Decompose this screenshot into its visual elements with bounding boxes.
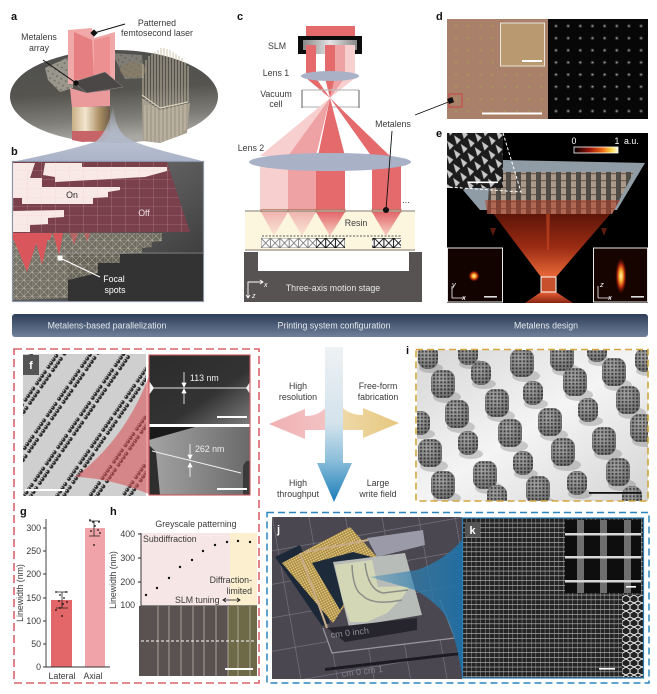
metalens chip <box>73 72 123 93</box>
panel g: bar chart <box>15 506 110 681</box>
bright field image <box>447 19 548 119</box>
panel i: lattices <box>406 346 649 502</box>
brown blur <box>120 62 146 78</box>
gold dashed frame <box>416 350 648 501</box>
diffraction-limited zone <box>230 533 257 606</box>
label g: g <box>20 506 27 518</box>
y ticks <box>120 529 135 610</box>
text: subdiffraction: Subdiffraction <box>143 534 197 544</box>
text: high resolution: High <box>289 381 307 391</box>
lens 1 <box>301 71 359 81</box>
data dots <box>55 519 101 617</box>
tick labels: 150 <box>26 593 41 603</box>
lattice blobs <box>417 350 648 501</box>
xz focal spot inset: z <box>599 280 604 289</box>
error bars <box>56 521 100 608</box>
label f: f <box>29 360 33 372</box>
text: focal spots: Focal <box>103 274 125 284</box>
xz focal spot inset: x <box>607 293 612 302</box>
text: diffraction limited: Diffraction- <box>210 575 252 585</box>
tick labels: 250 <box>26 546 41 556</box>
metalens slab <box>463 160 645 210</box>
main scale bar <box>482 112 542 114</box>
input beam <box>306 26 355 38</box>
tuning arrow <box>223 598 240 602</box>
tick labels: 300 <box>26 523 41 533</box>
banner text 1: Metalens-based parallelization <box>48 320 167 330</box>
tick labels: 200 <box>26 569 41 579</box>
lower red beam <box>72 131 110 142</box>
xz focal spot inset <box>594 248 648 302</box>
text: high resolution <box>279 381 317 402</box>
label i: i <box>406 345 409 357</box>
red zoom fan <box>75 376 149 494</box>
focus box <box>541 277 556 292</box>
pillar array lower mass <box>142 98 190 143</box>
photo: chevron lines <box>352 563 408 602</box>
subdiffraction zone <box>141 533 230 606</box>
beamlets from SLM <box>298 45 362 73</box>
text: high throughput: High <box>289 478 307 488</box>
text: high throughput <box>277 478 320 499</box>
axes labels <box>251 282 268 300</box>
text: focal spots: spots <box>104 285 126 295</box>
printed lattice <box>261 238 401 248</box>
text: metalens array: Metalens <box>21 32 57 42</box>
text labels c: Lens 2 <box>238 143 264 153</box>
funnel to b <box>12 106 205 162</box>
bottom right lattice <box>622 595 643 677</box>
panel j-k: blue dashed frame <box>267 512 649 683</box>
xy focal spot inset: y <box>451 280 457 289</box>
pillar array lower lines <box>145 104 185 142</box>
text: patterned laser: Patterned <box>138 18 176 28</box>
blue projection cone <box>370 540 462 675</box>
banner <box>12 314 648 337</box>
xy focal spot inset: x <box>461 293 466 302</box>
text: focal spots <box>103 274 126 295</box>
data points <box>145 540 251 596</box>
axes labels: z <box>251 293 256 300</box>
label e: e <box>436 128 442 140</box>
photo: tan strips <box>300 540 368 628</box>
SEM inset <box>447 133 503 188</box>
metalens leader <box>383 131 392 213</box>
banner text 2: Printing system configuration <box>278 320 391 330</box>
lens 2 <box>249 153 411 171</box>
substrate line <box>245 249 415 251</box>
SLM <box>298 36 362 54</box>
text: free-form: fabrication <box>358 392 398 402</box>
text labels c: Vacuum <box>260 89 292 99</box>
leader to red box <box>415 98 454 115</box>
text: diffraction limited: limited <box>227 586 252 596</box>
laser beam upper <box>68 28 115 84</box>
tick labels: 50 <box>31 639 41 649</box>
text: large write field: Large <box>367 478 389 488</box>
lower right shade <box>68 254 203 301</box>
pillar array <box>143 48 188 108</box>
x labels: Lateral <box>49 671 75 681</box>
dark background <box>12 162 204 302</box>
text labels c <box>238 41 411 228</box>
y title: Linewidth (nm) <box>15 564 25 622</box>
label b: b <box>11 146 18 158</box>
text: diffraction limited <box>210 575 252 596</box>
focus cylinder <box>72 107 110 132</box>
label f <box>23 355 39 375</box>
modulator off pixels <box>13 162 190 233</box>
wafer disc <box>10 50 218 143</box>
panel a: metalens array on wafer: femtosecond laser <box>121 28 193 38</box>
on pixels <box>13 163 167 232</box>
y ticks: 400 <box>120 529 135 539</box>
resin <box>245 212 415 251</box>
collimated beams <box>260 162 401 211</box>
banner text 3: Metalens design <box>514 320 578 330</box>
text labels c: Metalens <box>375 119 411 129</box>
inset 113 nm: 113 nm <box>190 373 219 383</box>
chart title: Greyscale patterning <box>155 519 237 529</box>
ghost lattice left <box>45 55 73 92</box>
axes <box>246 280 263 298</box>
inset 262 nm: 262 nm <box>195 444 224 454</box>
label j: j <box>276 524 280 536</box>
scale bar k <box>599 668 615 670</box>
inset 113 nm <box>149 355 250 424</box>
text: large write field: write field <box>358 489 397 499</box>
leader: laser <box>91 24 125 36</box>
label k <box>465 522 480 537</box>
scale bar f <box>25 489 65 491</box>
axial ray <box>546 210 550 250</box>
panel d: microscopy <box>415 11 648 119</box>
metalens plate <box>245 210 415 212</box>
text: stage: Three-axis motion stage <box>286 283 380 293</box>
photo: ruler frame <box>323 600 455 653</box>
panel c: printing system <box>237 11 422 302</box>
text labels c: cell <box>269 99 283 109</box>
inset scale bar <box>468 182 498 183</box>
axes <box>138 533 257 606</box>
grid <box>13 162 190 233</box>
photo: lower shadow <box>325 652 460 671</box>
text: free-form: Free-form <box>359 381 397 391</box>
y ticks: 300 <box>120 553 135 563</box>
red box <box>449 94 462 107</box>
text: high resolution: resolution <box>279 392 317 402</box>
y title: Linewidth (nm) <box>108 551 118 609</box>
photo: ruler text: cm 0 inch <box>330 625 369 640</box>
photo: CPU dark edge <box>275 545 330 626</box>
ghost lattice right <box>112 53 144 79</box>
text labels c: Resin <box>345 218 367 228</box>
converging beams <box>306 78 355 98</box>
tick labels: 0 <box>36 662 41 672</box>
panel a: metalens array on wafer: array <box>29 43 50 53</box>
arrow: high throughput <box>317 347 352 502</box>
axes labels: x <box>263 282 268 289</box>
colour bar <box>572 136 639 153</box>
blue border <box>462 518 644 678</box>
pillars <box>487 172 634 214</box>
dark field image <box>548 19 648 119</box>
tick labels <box>26 523 41 672</box>
scale bar i <box>589 492 641 494</box>
stage <box>244 252 422 302</box>
tick labels: 100 <box>26 616 41 626</box>
inset <box>500 23 544 66</box>
xy focal spot inset <box>448 248 502 302</box>
dashed callout <box>447 133 521 192</box>
panel k: woven lattice <box>462 518 644 678</box>
lattice <box>13 233 162 300</box>
photo: CPU gold board <box>282 527 377 623</box>
focal cones <box>13 233 90 272</box>
y ticks: 100 <box>120 600 135 610</box>
label h: h <box>110 506 117 518</box>
text labels c: SLM <box>268 41 286 51</box>
x label axial: Axial <box>83 671 103 681</box>
colour bar: 1 <box>615 136 620 146</box>
inset <box>565 520 641 593</box>
photo: top translucent slab <box>367 530 425 557</box>
photo: CPU chip <box>312 552 372 610</box>
resin focal row <box>262 235 401 237</box>
focal rays <box>492 212 612 277</box>
panel f-h: red dashed frame <box>14 349 259 683</box>
bars <box>51 600 72 667</box>
panel h: greyscale patterning <box>108 506 257 676</box>
lattice cells <box>622 595 643 677</box>
image background <box>417 350 648 501</box>
text: free-form <box>358 381 398 402</box>
text labels c: Lens 1 <box>263 68 289 78</box>
y ticks: 200 <box>120 577 135 587</box>
focusing cones <box>261 212 401 236</box>
lower flare <box>525 292 573 303</box>
text: high throughput: throughput <box>277 489 320 499</box>
text: Off: Off <box>138 208 150 218</box>
label k: k <box>469 525 476 537</box>
panel b: on/off pixels and focal spots <box>11 146 204 302</box>
laser beam lower <box>70 88 110 108</box>
colour bar: 0 <box>572 136 577 146</box>
text labels c: ... <box>402 195 410 205</box>
SEM strip <box>139 606 257 676</box>
label c: c <box>237 11 243 23</box>
panel f: SEM image <box>23 354 149 496</box>
photo: glass square <box>333 553 422 627</box>
text: SLM tuning: SLM tuning <box>175 595 220 605</box>
label d: d <box>436 11 443 23</box>
leader: metalens <box>43 60 78 85</box>
pillar base line <box>142 95 188 108</box>
focal spot pointer <box>58 256 100 277</box>
arrow: free-form fabrication <box>340 405 399 438</box>
red tint <box>485 200 620 214</box>
panel j: photo <box>272 517 462 679</box>
text: On: On <box>66 190 78 200</box>
focus core <box>541 277 556 292</box>
diverging beams <box>260 98 392 158</box>
inset border <box>149 355 250 495</box>
inset 262 nm <box>149 427 250 495</box>
panel a: metalens array on wafer <box>10 11 218 162</box>
ghost spots <box>490 228 607 236</box>
photo: chevron logo <box>335 560 410 622</box>
colour bar: a.u. <box>624 136 639 146</box>
black field <box>447 133 648 303</box>
central arrows <box>269 347 399 502</box>
photo: ruler strip <box>327 618 417 642</box>
inset scale bar <box>522 60 542 62</box>
vacuum cell <box>302 90 359 108</box>
arrow: high resolution <box>269 405 328 439</box>
axes <box>43 519 110 667</box>
photo: lower ruler text: cm 0 cm 1 <box>341 664 383 679</box>
panel e: simulated focusing <box>436 128 648 303</box>
label a: a <box>11 11 18 23</box>
text: large write field <box>358 478 397 499</box>
